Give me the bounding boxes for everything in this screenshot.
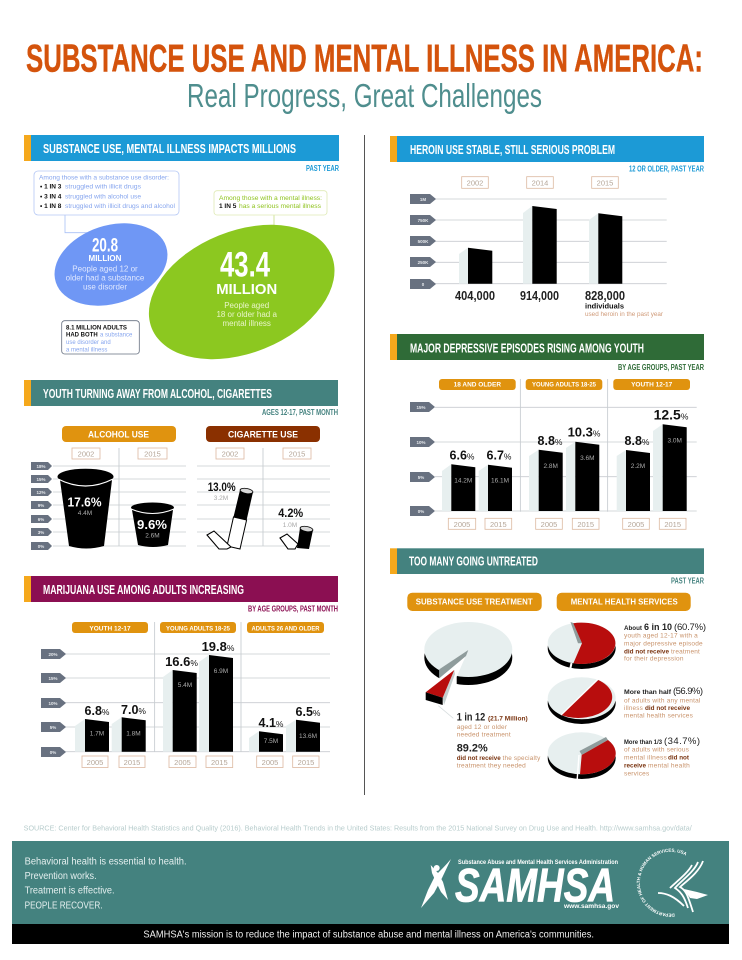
SAMHSA logo: SAMHSA — [455, 858, 615, 912]
cigarette 2015 — [278, 506, 313, 549]
section heading — [24, 576, 338, 602]
text: 60.7 percent: major depressive episode — [624, 641, 703, 648]
text: 56.9 percent — [624, 686, 703, 720]
section heading — [24, 135, 339, 161]
blue ellipse: 20.8 million — [44, 209, 178, 320]
cup: alcohol 2002: 17.6% — [68, 495, 102, 510]
section heading: HEROIN USE STABLE, STILL SERIOUS PROBLEM — [410, 142, 615, 157]
cup: alcohol 2002 — [58, 469, 114, 548]
year labels — [462, 177, 618, 188]
axis and grid: 3% — [38, 530, 44, 535]
cup: alcohol 2002: 4.4M — [78, 510, 92, 517]
callout: mental illness: has a serious mental illness — [239, 203, 322, 210]
axis and grid: 500K — [418, 239, 429, 244]
bar: 18 and older 2005: 14.2M — [454, 477, 472, 484]
panel: substance use and mental illness impacts millions — [24, 135, 354, 385]
caption — [585, 303, 664, 318]
bar: 18 and older 2015 — [479, 448, 512, 511]
text: 34.7 percent: did not — [668, 755, 690, 762]
year labels: 2002 — [467, 178, 483, 188]
axis and grid — [410, 194, 667, 289]
caption: individuals — [585, 303, 624, 310]
axis and grid: 10% — [48, 701, 58, 706]
text: 1 in 12: needed treatment — [457, 732, 511, 739]
footer message: Treatment is effective. — [25, 886, 115, 897]
bar: 2015 — [585, 213, 625, 303]
text: 34.7 percent: of adults with serious — [624, 747, 690, 754]
axis and grid: 0% — [418, 509, 424, 514]
age group pills: ADULTS 26 AND OLDER — [252, 626, 320, 633]
age group pills: YOUTH 12-17 — [89, 626, 131, 633]
bar: youth 2015: 1.8M — [126, 731, 141, 738]
year labels: 2014 — [532, 178, 548, 188]
pill: mental health services — [557, 593, 691, 611]
year labels: 2005 — [174, 758, 191, 767]
section heading — [24, 380, 338, 406]
mission band — [12, 924, 729, 944]
bar: youth 2005 — [75, 704, 110, 752]
bar: young adults 2015: 19.8% — [202, 639, 235, 654]
green ellipse: 43.4 million: 43.4 — [220, 246, 270, 285]
text: 34.7 percent — [624, 736, 700, 778]
axis and grid: 15% — [48, 676, 58, 681]
bar: young adults 2015: 6.9M — [214, 668, 228, 675]
text: 34.7 percent: mental illness — [624, 755, 668, 762]
footer message: PEOPLE RECOVER. — [25, 900, 103, 911]
text: 1 in 12: treatment they needed — [457, 763, 526, 770]
text: 60.7 percent — [624, 622, 706, 663]
cup: alcohol 2015: 2.6M — [145, 532, 160, 540]
text: 1 in 12: (21.7 Million) — [488, 717, 528, 723]
text: 34.7 percent: services — [624, 771, 650, 778]
bar: 18 and older 2005 — [442, 448, 475, 511]
bar: youth 2015 — [112, 703, 146, 752]
pill: substance use treatment — [407, 593, 542, 611]
cup: alcohol 2015 — [131, 502, 174, 547]
pill: alcohol use — [62, 426, 176, 442]
callout: both disorders: a mental illness — [66, 347, 107, 353]
cup: alcohol 2015: 9.6% — [137, 517, 167, 532]
qualifier: AGES 12-17, PAST MONTH — [262, 408, 338, 417]
pill: mental health services: MENTAL HEALTH SERVICES — [571, 596, 678, 606]
callout: mental illness — [214, 191, 327, 226]
bar: youth 2015 — [653, 406, 689, 511]
year labels: 2015 — [664, 520, 681, 529]
bar: youth 2005: 6.8% — [85, 704, 110, 718]
text: 56.9 percent: (56.9%) — [673, 686, 703, 697]
axis and grid: 6% — [38, 517, 44, 522]
SAMHSA logo: Substance Abuse and Mental Health Services Administration — [458, 860, 618, 866]
subtitle: Real Progress, Great Challenges — [187, 77, 542, 114]
bar: 2014: 914,000 — [520, 289, 559, 303]
bar: adults 2015: 13.6M — [299, 733, 317, 740]
green ellipse: 43.4 million: 18 or older had a — [216, 310, 277, 319]
text: 60.7 percent: About — [624, 625, 643, 632]
callout: both disorders: 8.1 MILLION ADULTS — [66, 325, 127, 331]
axis and grid: 12% — [36, 490, 46, 495]
footer message — [25, 856, 187, 911]
callout: both disorders — [62, 321, 139, 354]
source line: SOURCE: Center for Behavioral Health Statistics and Quality (2016). Behavioral Health Trends in the United States: Results from the 2015 National Survey on Drug Use and Health. http://www.samhsa.gov/data/ — [24, 826, 692, 833]
bar: young adults 2005: 5.4M — [178, 682, 192, 689]
bar: 2002 — [455, 248, 495, 303]
section heading: YOUTH TURNING AWAY FROM ALCOHOL, CIGARETTES — [43, 386, 272, 401]
footer message: Behavioral health is essential to health. — [25, 856, 187, 867]
year labels: 2015 — [211, 758, 228, 767]
pie: 1 in 12 substance use treatment — [424, 622, 512, 718]
bar: 2014 — [520, 206, 559, 303]
year labels: 2015 — [124, 758, 140, 767]
callout: both disorders: a substance — [100, 333, 133, 339]
age group pills: YOUNG ADULTS 18-25 — [166, 626, 230, 633]
text: 34.7 percent: mental health — [648, 763, 690, 770]
text: 1 in 12: the specialty — [502, 755, 541, 762]
axis and grid: 18% — [36, 464, 46, 469]
cigarette 2002: 13.0% — [208, 480, 236, 494]
text: 56.9 percent: More than half — [624, 689, 672, 696]
year labels: 2015 — [289, 450, 305, 458]
year labels — [448, 518, 686, 529]
section heading — [390, 334, 704, 360]
panel: marijuana use — [24, 576, 338, 768]
text: 56.9 percent: did not receive — [645, 705, 690, 712]
text: 1 in 12: 1 in 12 — [457, 712, 485, 724]
text: 1 in 12: 89.2% — [457, 743, 488, 755]
callout: mental illness: 1 IN 5 — [219, 203, 237, 210]
section heading: SUBSTANCE USE, MENTAL ILLNESS IMPACTS MILLIONS — [43, 141, 296, 156]
cigarette 2002 — [207, 480, 253, 549]
text: 56.9 percent: of adults with any mental — [624, 697, 701, 704]
qualifier: BY AGE GROUPS, PAST MONTH — [248, 605, 338, 614]
pie: 60.7 percent — [548, 622, 616, 670]
year labels — [72, 448, 311, 459]
text: 60.7 percent: (60.7%) — [674, 622, 706, 633]
bar: 18 and older 2015: 16.1M — [491, 477, 509, 484]
callout: substance use disorder: • 3 IN 4 — [40, 193, 62, 200]
bar: adults 2005: 4.1% — [259, 716, 284, 730]
axis and grid: 10% — [416, 440, 426, 445]
qualifier: PAST YEAR — [306, 164, 339, 173]
pill: cigarette use: CIGARETTE USE — [228, 429, 298, 439]
SAMHSA logo: www.samhsa.gov — [563, 904, 620, 910]
year labels: 2015 — [490, 520, 507, 529]
qualifier: 12 OR OLDER, PAST YEAR — [629, 165, 704, 174]
age group pills — [72, 622, 324, 633]
bar: youth 2005 — [617, 434, 650, 511]
pill: cigarette use — [206, 426, 320, 442]
axis and grid: 0% — [50, 750, 56, 755]
age group pills: YOUTH 12-17 — [631, 382, 673, 388]
blue ellipse: 20.8 million: use disorder — [83, 282, 127, 291]
bar: youth 2005: 1.7M — [90, 731, 104, 738]
bar: adults 2005 — [249, 716, 284, 752]
year labels: 2015 — [298, 758, 314, 767]
callout: substance use disorder: • 1 IN 3 — [40, 184, 62, 191]
bar: 2002: 404,000 — [455, 289, 495, 303]
blue ellipse: 20.8 million: People aged 12 or — [72, 265, 138, 274]
panel: youth alcohol and cigarettes — [24, 380, 338, 550]
year labels: 2005 — [454, 520, 470, 529]
axis and grid: 9% — [38, 503, 44, 508]
text: 1 in 12: did not receive — [457, 755, 501, 762]
callout: both disorders: use disorder and — [66, 340, 111, 346]
age group pills: YOUNG ADULTS 18-25 — [532, 382, 596, 388]
axis and grid: 750K — [418, 218, 429, 223]
axis and grid: 15% — [36, 477, 46, 482]
panel: heroin use — [390, 136, 704, 318]
section heading — [390, 136, 704, 162]
pill: substance use treatment: SUBSTANCE USE TREATMENT — [416, 596, 533, 606]
bar: young adults 2005: 16.6% — [165, 654, 198, 669]
pie: 56.9 percent — [548, 677, 616, 724]
axis and grid: 0% — [38, 544, 44, 549]
year labels: 2005 — [541, 520, 557, 529]
bar: young adults 2015 — [199, 639, 235, 752]
year labels: 2002 — [222, 450, 238, 458]
callout: substance use disorder: Among those with a substance use disorder: — [39, 174, 169, 181]
bar: young adults 2015 — [566, 425, 601, 511]
bar: young adults 2005: 8.8% — [538, 434, 563, 448]
blue ellipse: 20.8 million: older had a substance — [66, 274, 145, 283]
SAMHSA logo — [421, 858, 620, 912]
text: 56.9 percent: mental health services — [624, 713, 694, 720]
callout: substance use disorder: struggled with illicit drugs — [65, 184, 142, 191]
axis and grid: 1M — [420, 197, 426, 202]
axis and grid: 5% — [50, 725, 56, 730]
axis and grid — [31, 448, 330, 550]
bar: youth 2015: 3.0M — [667, 437, 682, 444]
bar: adults 2015 — [286, 705, 321, 752]
text: 60.7 percent: did not receive — [624, 648, 669, 655]
mission band: SAMHSA's mission is to reduce the impact of substance abuse and mental illness on America's communities. — [143, 930, 594, 941]
HHS seal — [636, 848, 708, 917]
bar: young adults 2005: 2.8M — [543, 463, 558, 470]
footer message: Prevention works. — [25, 871, 97, 882]
year labels: 2005 — [262, 758, 278, 767]
pill: alcohol use: ALCOHOL USE — [88, 429, 149, 439]
axis and grid: 20% — [48, 652, 58, 657]
bar: 18 and older 2005: 6.6% — [450, 448, 475, 462]
qualifier: PAST YEAR — [671, 576, 704, 585]
text: 56.9 percent: illness — [624, 705, 644, 712]
text: 60.7 percent: youth aged 12-17 with a — [624, 633, 698, 640]
green ellipse: 43.4 million: MILLION — [216, 281, 277, 298]
bar: young adults 2005 — [163, 654, 198, 752]
text: 34.7 percent: receive — [624, 763, 646, 770]
year labels: 2015 — [144, 450, 161, 458]
qualifier: BY AGE GROUPS, PAST YEAR — [618, 363, 704, 372]
year labels: 2005 — [628, 520, 644, 529]
bar: youth 2005: 8.8% — [625, 434, 650, 448]
bar: young adults 2005 — [529, 434, 563, 511]
panel: too many going untreated — [390, 548, 706, 782]
callout: substance use disorder: • 1 IN 8 — [40, 203, 62, 210]
section heading: MARIJUANA USE AMONG ADULTS INCREASING — [43, 582, 244, 597]
axis and grid: 15% — [416, 405, 426, 410]
age group pills: 18 AND OLDER — [454, 382, 501, 388]
callout: mental illness: Among those with a mental illness: — [219, 195, 322, 202]
year labels: 2015 — [597, 178, 613, 188]
green ellipse: 43.4 million: mental illness — [222, 319, 271, 328]
bar: adults 2005: 7.5M — [264, 738, 278, 745]
cigarette 2015: 4.2% — [278, 506, 303, 520]
callout: substance use disorder — [34, 171, 179, 233]
year labels: 2015 — [577, 520, 594, 529]
bar: 18 and older 2015: 6.7% — [487, 448, 512, 462]
axis and grid: 0 — [422, 282, 425, 287]
bar: youth 2015: 12.5% — [654, 406, 689, 422]
callout: substance use disorder: struggled with illicit drugs and alcohol — [65, 203, 176, 210]
panel: major depressive episodes — [390, 334, 704, 529]
text: 34.7 percent: More than 1/3 — [624, 739, 662, 746]
bar: young adults 2015: 10.3% — [568, 425, 601, 440]
callout: substance use disorder: struggled with alcohol use — [65, 193, 141, 200]
bar: young adults 2015: 3.6M — [580, 455, 595, 462]
bar: youth 2005: 2.2M — [631, 463, 645, 470]
text: 1 in 12: aged 12 or older — [457, 724, 508, 731]
footer band — [12, 841, 729, 924]
cigarette 2015: 1.0M — [283, 522, 297, 529]
green ellipse: 43.4 million: People aged — [224, 301, 269, 310]
axis and grid — [41, 622, 330, 757]
text: 60.7 percent: for their depression — [624, 656, 684, 663]
section heading: TOO MANY GOING UNTREATED — [409, 554, 538, 569]
text: 1 in 12 — [457, 712, 541, 770]
bar: youth 2015: 7.0% — [121, 703, 146, 717]
text: 60.7 percent: 6 in 10 — [644, 622, 672, 633]
section heading — [390, 548, 704, 574]
caption: used heroin in the past year — [585, 311, 664, 318]
axis and grid: 5% — [418, 475, 424, 480]
axis and grid: 250K — [418, 260, 429, 265]
blue ellipse: 20.8 million: MILLION — [89, 254, 122, 263]
bar: adults 2015: 6.5% — [296, 705, 321, 719]
year labels: 2005 — [87, 758, 103, 767]
text: 60.7 percent: treatment — [671, 648, 700, 655]
green ellipse: 43.4 million — [129, 199, 354, 385]
year labels: 2002 — [78, 450, 94, 458]
bar: 2015: 828,000 — [585, 289, 625, 303]
text: 34.7 percent: (34.7%) — [664, 736, 700, 747]
year labels — [82, 756, 319, 768]
axis and grid — [410, 379, 697, 516]
age group pills — [439, 379, 690, 390]
cigarette 2002: 3.2M — [214, 495, 228, 502]
callout: both disorders: HAD BOTH — [66, 333, 98, 339]
blue ellipse: 20.8 million: 20.8 — [92, 236, 118, 257]
HHS seal: DEPARTMENT OF HEALTH & HUMAN SERVICES, USA — [636, 848, 686, 917]
pie: 34.7 percent — [548, 732, 616, 782]
